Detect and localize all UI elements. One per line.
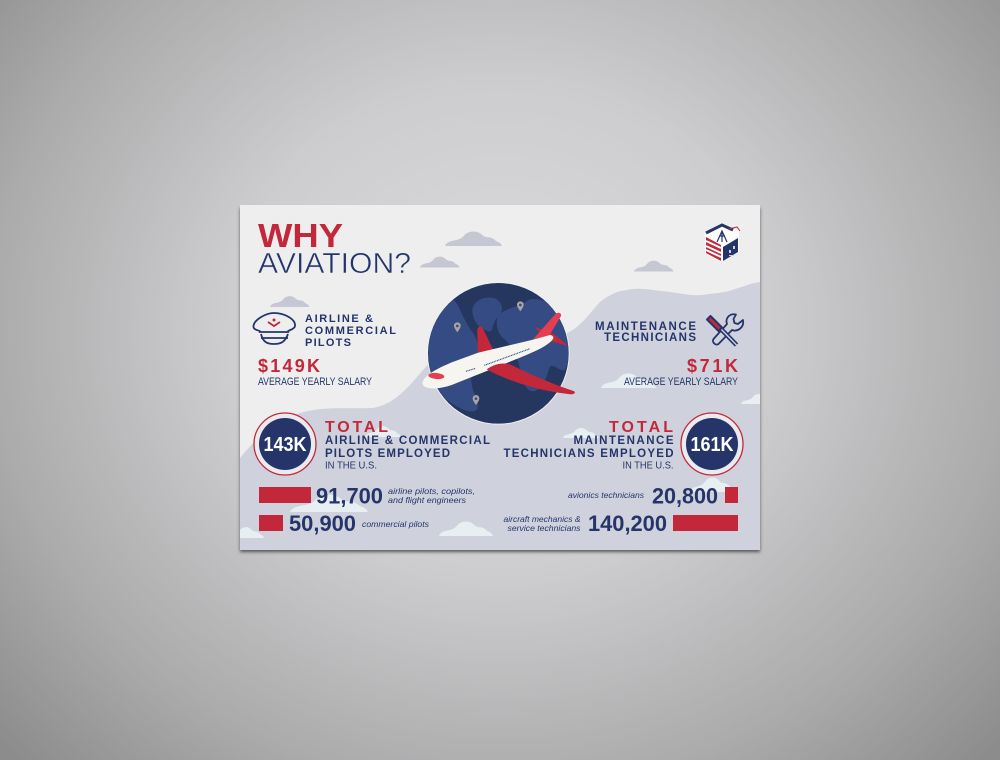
maintenance salary: $71K — [687, 356, 738, 376]
cloud: top right — [634, 261, 674, 272]
label: aircraft mechanics — [504, 514, 581, 533]
cloud: above pilots — [270, 296, 310, 307]
heading: airline & commercial pilots: AIRLINE & — [305, 313, 373, 325]
tail and fins — [534, 327, 568, 346]
circle badge 161K — [681, 413, 743, 475]
heading: maintenance technicians: TECHNICIANS — [604, 332, 696, 344]
panel: infographic card — [228, 205, 777, 550]
label: airline pilots: airline pilots, copilots, — [388, 486, 475, 496]
heading: total technicians employed: TOTAL — [609, 419, 673, 436]
maintenance salary — [624, 358, 738, 385]
cloud: bottom left — [240, 527, 264, 538]
value: 50,900: 50,900 — [289, 511, 356, 536]
windows — [466, 349, 530, 371]
background wave — [240, 282, 760, 550]
fuselage — [422, 335, 553, 388]
heading: total technicians employed: TECHNICIANS EMPLOYED — [504, 448, 674, 460]
label: airline pilots: and flight engineers — [388, 495, 467, 505]
title — [258, 224, 410, 274]
value: 91,700: 91,700 — [316, 484, 383, 508]
logo — [705, 224, 740, 262]
heading: airline & commercial pilots: PILOTS — [305, 337, 351, 349]
heading: total technicians employed — [504, 419, 674, 472]
heading: total pilots employed: TOTAL — [325, 419, 388, 436]
cloud: bottom centre — [439, 521, 493, 536]
cloud: behind total left — [365, 426, 401, 437]
heading: total technicians employed: MAINTENANCE — [574, 435, 674, 447]
cockpit accent — [428, 372, 445, 380]
cloud: behind total right — [563, 428, 599, 438]
bar: 50,900 — [259, 515, 283, 531]
heading: maintenance technicians — [596, 322, 696, 341]
vertical stabiliser — [533, 313, 561, 339]
heading: total technicians employed: IN THE U.S. — [622, 460, 674, 472]
map pins — [454, 301, 524, 405]
cloud: under first pilots bar — [290, 495, 368, 512]
value: 140,200: 140,200 — [588, 511, 667, 536]
card shadow — [240, 208, 760, 552]
cloud: near maintenance salary — [601, 373, 656, 388]
title: WHY — [258, 217, 343, 254]
bar: 20,800 — [725, 487, 738, 503]
circle badge 161K: 161K — [690, 434, 734, 456]
pilots salary: $149K — [258, 356, 320, 376]
cloud: right edge — [741, 394, 760, 404]
bar chart: technicians — [504, 484, 738, 536]
label: airline pilots — [388, 488, 474, 504]
heading: total pilots employed: AIRLINE & COMMERCIAL — [325, 435, 490, 447]
heading: total pilots employed: PILOTS EMPLOYED — [325, 448, 450, 460]
heading: airline & commercial pilots — [305, 314, 396, 346]
circle badge 143K: 143K — [264, 434, 307, 456]
heading: total pilots employed — [325, 419, 490, 472]
circle badge 143K — [254, 413, 316, 475]
globe — [428, 334, 570, 424]
title: AVIATION? — [258, 248, 411, 280]
label: aircraft mechanics: service technicians — [508, 523, 581, 533]
icon: pilot cap — [253, 313, 295, 344]
bar: 91,700 — [259, 487, 311, 503]
icon: tools — [707, 314, 743, 345]
value: 20,800: 20,800 — [652, 484, 718, 508]
maintenance salary: AVERAGE YEARLY SALARY — [624, 376, 739, 388]
near wing — [487, 364, 575, 394]
label: commercial pilots: commercial pilots — [362, 519, 430, 529]
globe and airplane — [422, 282, 575, 425]
cloud: top centre large — [445, 231, 502, 246]
cloud: behind 20,800 — [692, 478, 730, 492]
bar chart: pilots — [259, 484, 475, 536]
label: aircraft mechanics: aircraft mechanics & — [504, 514, 581, 524]
heading: maintenance technicians: MAINTENANCE — [595, 321, 696, 333]
pilots salary: AVERAGE YEARLY SALARY — [258, 376, 373, 388]
bar: 140,200 — [673, 515, 738, 531]
pilots salary — [258, 358, 372, 385]
heading: airline & commercial pilots: COMMERCIAL — [305, 325, 396, 337]
heading: total pilots employed: IN THE U.S. — [325, 460, 377, 472]
label: avionics technicians: avionics technicians — [568, 490, 645, 500]
cloud: top centre small — [420, 257, 460, 268]
